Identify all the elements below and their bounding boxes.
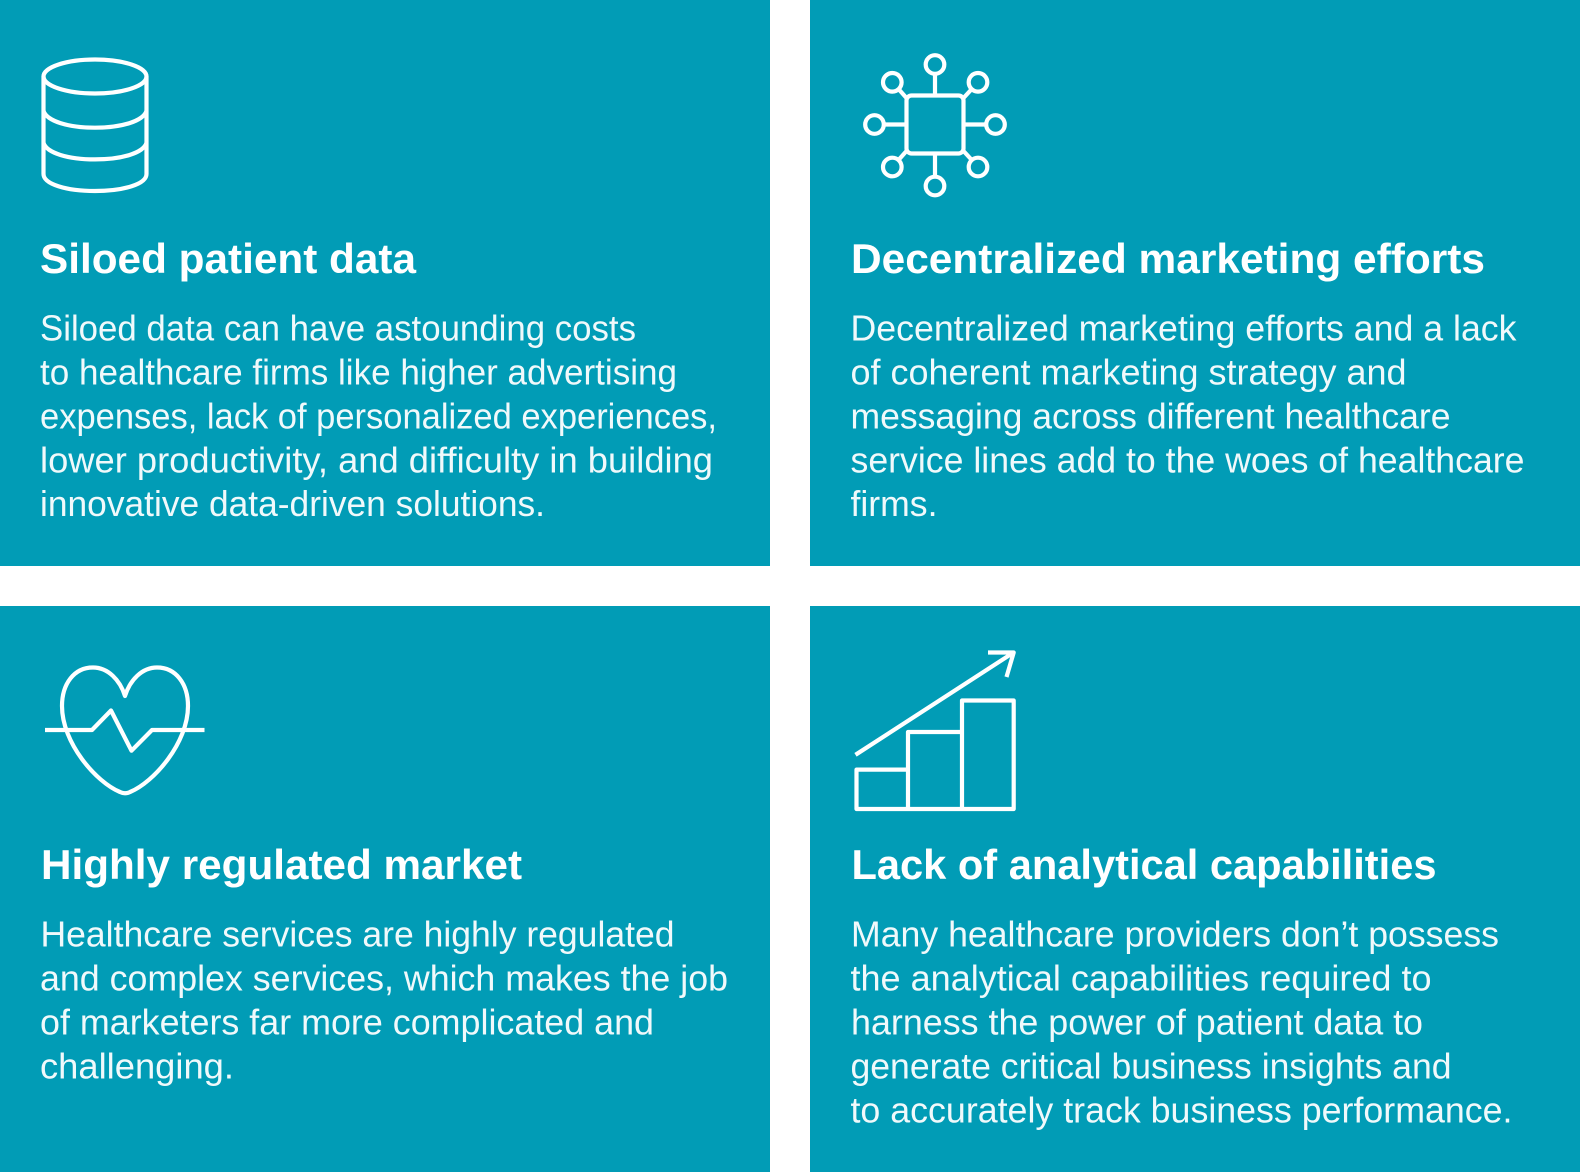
text: analytical capabilities description: harness the power of patient data to <box>851 1002 1423 1042</box>
text: analytical capabilities description: generate critical business insights and <box>850 1046 1452 1086</box>
panel: highly regulated market <box>0 606 770 1172</box>
text: siloed patient data description: expenses, lack of personalized experiences, <box>40 396 717 436</box>
panel: siloed patient data <box>0 0 770 566</box>
text: analytical capabilities description: Many healthcare providers don’t possess <box>851 914 1499 954</box>
icon: heart with pulse <box>45 668 204 793</box>
text: decentralized marketing description: service lines add to the woes of healthcare <box>850 440 1524 480</box>
text: analytical capabilities description: the analytical capabilities required to <box>850 958 1432 998</box>
icon: database <box>44 60 146 191</box>
text: highly regulated description: and complex services, which makes the job <box>40 958 728 998</box>
text: siloed patient data description: lower productivity, and difficulty in building <box>40 440 713 480</box>
icon: bar chart with arrow <box>856 652 1014 809</box>
text: siloed patient data description <box>40 308 717 524</box>
text: analytical capabilities description <box>850 914 1512 1130</box>
icon: network chip <box>865 55 1005 195</box>
text: decentralized marketing description: firms. <box>850 483 938 524</box>
heading: highly regulated market: Highly regulated market <box>41 841 522 888</box>
text: highly regulated description <box>40 914 728 1086</box>
text: decentralized marketing description: of coherent marketing strategy and <box>850 352 1406 392</box>
heading: decentralized marketing efforts: Decentralized marketing efforts <box>851 235 1485 282</box>
text: highly regulated description: Healthcare services are highly regulated <box>40 914 674 954</box>
text: siloed patient data description: innovative data-driven solutions. <box>40 483 545 524</box>
text: siloed patient data description: to healthcare firms like higher advertising <box>40 352 677 392</box>
text: decentralized marketing description <box>850 308 1524 524</box>
text: highly regulated description: challenging. <box>40 1046 234 1086</box>
heading: siloed patient data: Siloed patient data <box>40 235 417 282</box>
text: analytical capabilities description: to accurately track business performance. <box>850 1090 1512 1130</box>
text: highly regulated description: of marketers far more complicated and <box>40 1002 654 1042</box>
text: siloed patient data description: Siloed data can have astounding costs <box>40 308 636 348</box>
text: decentralized marketing description: Decentralized marketing efforts and a lack <box>850 308 1517 348</box>
heading: lack of analytical capabilities: Lack of analytical capabilities <box>852 841 1436 888</box>
text: decentralized marketing description: messaging across different healthcare <box>850 396 1450 436</box>
panel: lack of analytical capabilities <box>810 606 1580 1172</box>
panel: decentralized marketing efforts <box>810 0 1580 566</box>
